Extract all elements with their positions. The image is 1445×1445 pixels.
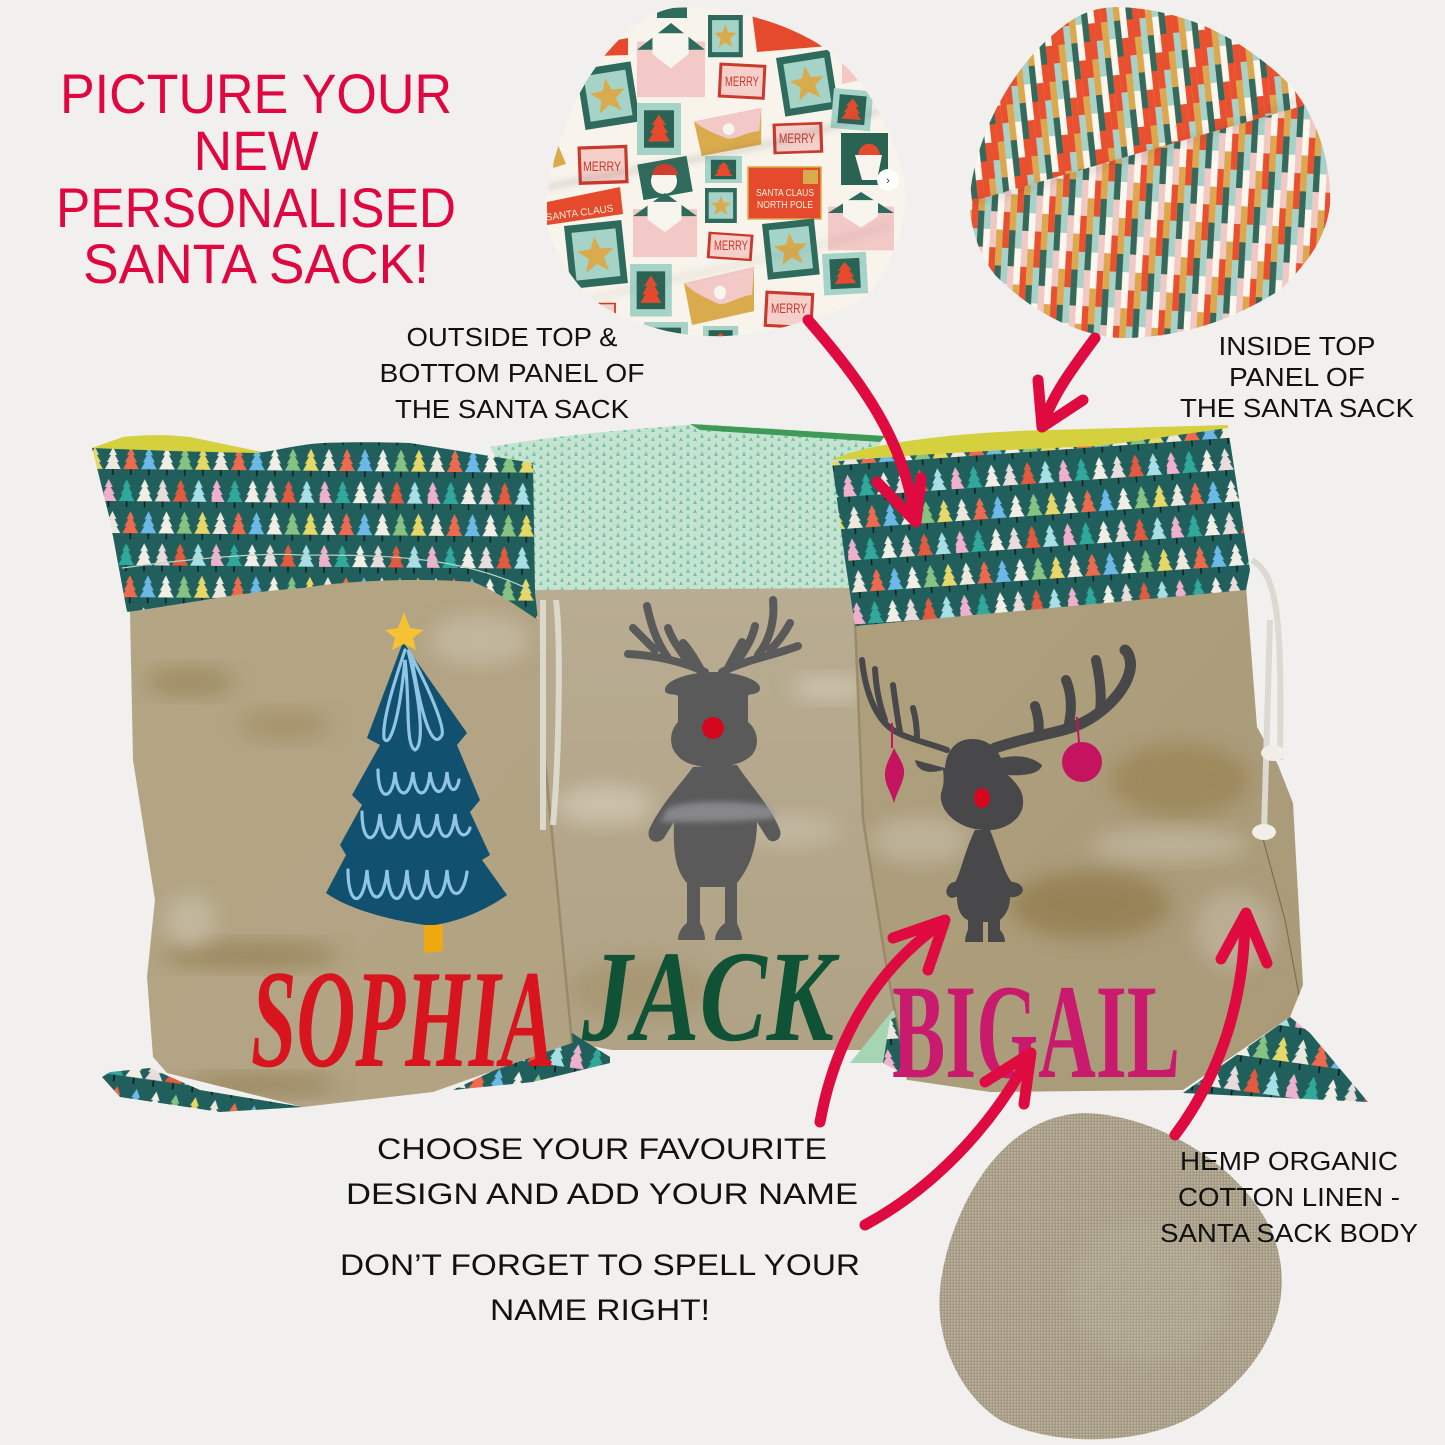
icon: carousel dot <box>877 169 899 191</box>
rope <box>543 600 559 830</box>
fabric swatch: outside stamps pattern: MERRY <box>725 73 759 89</box>
fabric flap bottom <box>883 1010 915 1080</box>
fabric swatch: outside stamps pattern: MERRY <box>583 158 621 174</box>
sack body <box>855 586 1303 1092</box>
fabric flap bottom right <box>453 1033 610 1090</box>
arrow: outside panel <box>808 320 921 522</box>
icon: reindeer Jack <box>628 600 798 940</box>
text: choose design: DESIGN AND ADD YOUR NAME <box>346 1178 858 1211</box>
sack edge shadow <box>545 760 572 1043</box>
label: inside panel: THE SANTA SACK <box>1180 393 1415 423</box>
label: outside panel: THE SANTA SACK <box>395 394 630 424</box>
title: PICTURE YOUR <box>60 62 452 125</box>
label: inside panel: PANEL OF <box>1229 362 1365 392</box>
text: spelling reminder: DON’T FORGET TO SPELL YOUR <box>340 1249 860 1282</box>
name: SOPHIA: SOPHIA <box>251 942 555 1097</box>
fabric flap right <box>1183 1017 1368 1102</box>
fabric swatch: outside stamps pattern: SANTA CLAUS <box>545 203 614 224</box>
text: choose design: CHOOSE YOUR FAVOURITE <box>377 1133 827 1166</box>
title: NEW <box>194 119 319 182</box>
fabric flap bottom left <box>102 1068 303 1112</box>
label: hemp linen body: SANTA SACK BODY <box>1160 1218 1418 1248</box>
fabric band <box>832 428 1250 626</box>
fabric swatch: outside stamps pattern <box>546 8 894 336</box>
fabric band <box>92 442 538 620</box>
sack lining <box>832 425 1228 460</box>
text: spelling reminder <box>340 1249 860 1327</box>
sack lining <box>92 435 262 458</box>
rope <box>1252 560 1280 832</box>
fabric swatch: hemp linen <box>939 1113 1282 1439</box>
sack edge shadow <box>855 622 908 1080</box>
label: outside panel <box>380 322 644 424</box>
fabric swatch: inside stripes pattern <box>960 0 1340 345</box>
label: outside panel: BOTTOM PANEL OF <box>380 358 644 388</box>
icon: Christmas tree <box>326 612 507 953</box>
fabric swatch: outside stamps pattern: MERRY <box>771 300 807 316</box>
name: JACK: JACK <box>581 925 840 1069</box>
sack body <box>130 570 572 1107</box>
mint fold under sack <box>850 1010 905 1063</box>
right sack: Abigail <box>832 425 1368 1107</box>
label: inside panel: INSIDE TOP <box>1218 331 1376 361</box>
title: PERSONALISED <box>56 176 456 239</box>
fabric swatch: outside stamps pattern: NORTH POLE <box>757 200 813 211</box>
arrow: inside panel <box>1038 338 1095 427</box>
text: spelling reminder: NAME RIGHT! <box>490 1294 710 1327</box>
left sack: Sophia <box>92 435 610 1112</box>
label: hemp linen body <box>1160 1146 1418 1248</box>
title <box>56 62 456 295</box>
text: choose design <box>346 1133 858 1211</box>
icon: carousel dot: › <box>886 175 890 187</box>
label: outside panel: OUTSIDE TOP & <box>406 322 618 352</box>
middle sack: Jack <box>490 424 900 1069</box>
rope knots <box>1252 745 1285 840</box>
title: SANTA SACK! <box>83 232 429 295</box>
fabric swatch: outside stamps pattern: SANTA CLAUS <box>756 188 814 199</box>
arrow: spell name <box>865 1053 1031 1225</box>
icon: reindeer with baubles <box>862 650 1131 942</box>
arrow: choose design <box>820 920 945 1122</box>
label: inside panel <box>1180 331 1415 423</box>
name: ABIGAIL: BIGAIL <box>892 958 1180 1107</box>
fabric swatch: outside stamps pattern: MERRY <box>779 130 815 146</box>
fabric swatch: outside stamps pattern: MERRY <box>714 237 748 253</box>
label: hemp linen body: COTTON LINEN - <box>1178 1182 1400 1212</box>
label: hemp linen body: HEMP ORGANIC <box>1180 1146 1398 1176</box>
icon: baubles <box>885 717 1102 803</box>
arrow: linen body <box>1175 913 1267 1135</box>
